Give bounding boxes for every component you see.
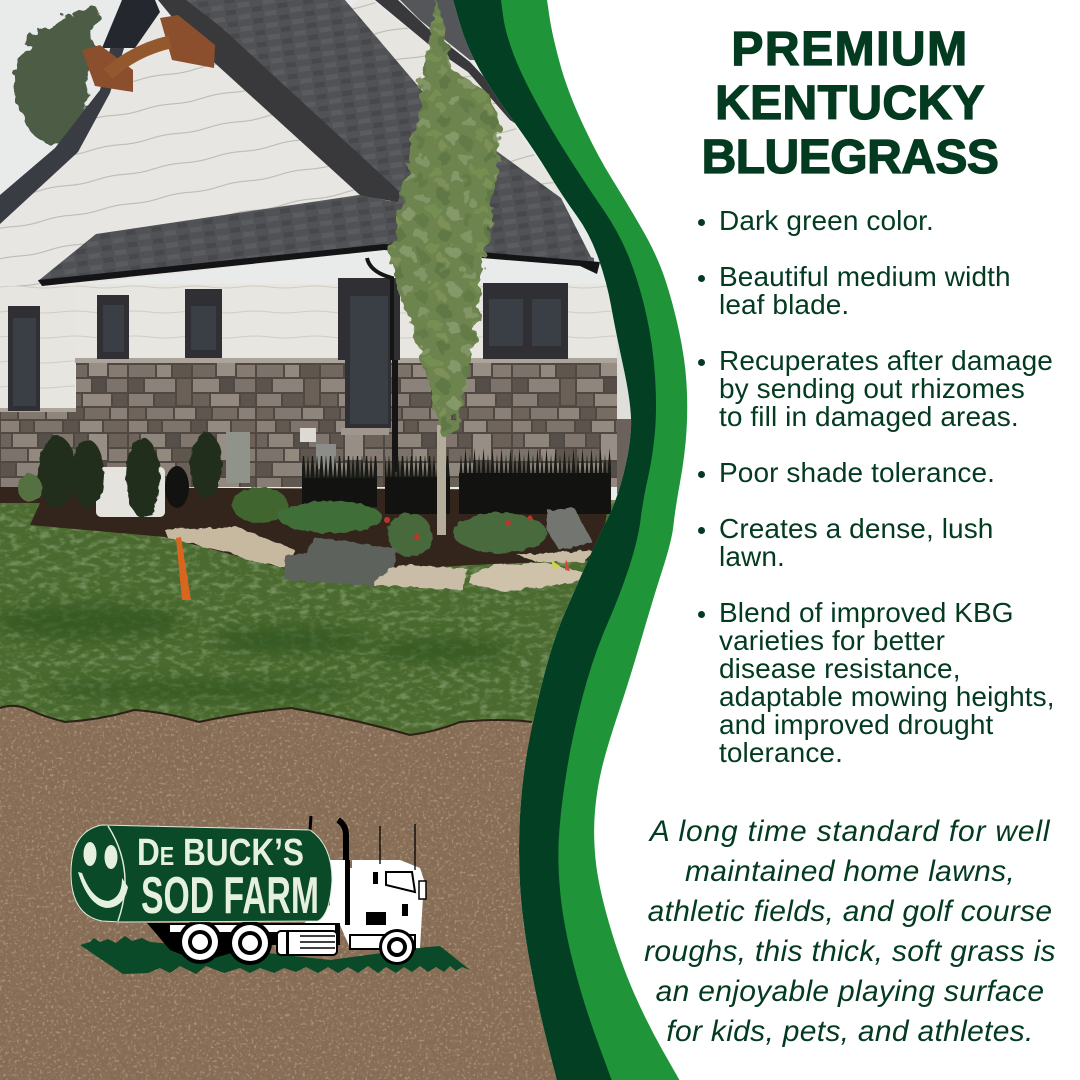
logo grass xyxy=(80,936,470,974)
italic closing statement: A long time standard for well xyxy=(650,815,1050,848)
mulch bed xyxy=(0,487,610,570)
generator xyxy=(96,467,165,517)
red flowers xyxy=(384,516,532,540)
bullet: blend: and improved drought xyxy=(719,709,993,740)
bullet: color: Dark green color. xyxy=(719,205,934,236)
italic closing statement: for kids, pets, and athletes. xyxy=(666,1015,1034,1048)
upper right gable xyxy=(345,0,565,198)
title: BLUEGRASS xyxy=(702,131,998,184)
shrubs xyxy=(38,432,222,518)
right roof trim xyxy=(375,0,515,124)
mowing stripes xyxy=(0,604,510,700)
side wall xyxy=(617,338,631,419)
soil xyxy=(0,706,557,1080)
sod roll xyxy=(71,825,332,922)
bullet list of features xyxy=(698,205,1055,768)
stone base xyxy=(76,362,617,487)
lower white wall xyxy=(75,284,617,362)
dark hedges xyxy=(165,466,611,514)
bullet: recovery: by sending out rhizomes xyxy=(719,373,1025,404)
bullet: density xyxy=(697,515,1077,571)
wave: light green band xyxy=(501,0,720,1080)
windows xyxy=(8,278,568,428)
logo: De Buck's Sod Farm xyxy=(71,816,470,974)
garden plants xyxy=(18,474,547,557)
top right roof corner xyxy=(400,0,474,60)
bullet: blend: Blend of improved KBG xyxy=(719,597,1014,628)
italic closing statement: athletic fields, and golf course xyxy=(648,895,1052,928)
downspout xyxy=(367,258,392,360)
sod lawn xyxy=(0,500,645,760)
utility boxes xyxy=(226,428,336,483)
truck trailer and cab xyxy=(300,860,424,948)
main grey roof xyxy=(180,0,592,259)
white text panel background xyxy=(547,0,1080,1080)
lower porch roof xyxy=(38,195,594,283)
dark gable box xyxy=(102,0,160,48)
logo wordmark: DE BUCK’S xyxy=(137,832,304,874)
sill xyxy=(341,428,389,435)
bullet: shade: Poor shade tolerance. xyxy=(719,457,995,488)
background tree xyxy=(16,4,100,143)
italic closing statement: roughs, this thick, soft grass is xyxy=(644,935,1056,968)
photo: house with new sod lawn xyxy=(0,0,660,1080)
sod edge xyxy=(0,706,532,735)
stone caps xyxy=(75,358,617,363)
italic closing statement: an enjoyable playing surface xyxy=(656,975,1044,1008)
bullet: leaf blade xyxy=(697,263,1077,319)
rocks xyxy=(165,508,593,592)
sky xyxy=(0,0,618,500)
background artwork: photo, green waves and logo xyxy=(0,0,688,1080)
bullet: density: lawn. xyxy=(719,541,785,572)
exhaust stacks xyxy=(338,820,346,860)
bullet: blend: adaptable mowing heights, xyxy=(719,681,1055,712)
title xyxy=(702,23,998,184)
bullet: recovery xyxy=(697,347,1077,431)
smiley face xyxy=(78,842,128,908)
timber bracket xyxy=(82,15,215,92)
title: KENTUCKY xyxy=(715,77,985,130)
bullet: blend: tolerance. xyxy=(719,737,843,768)
cab windows xyxy=(386,872,415,892)
flags xyxy=(551,559,570,571)
bullet: leaf blade: Beautiful medium width xyxy=(719,261,1011,292)
logo wordmark: SOD FARM xyxy=(141,867,319,925)
italic closing statement: maintained home lawns, xyxy=(685,855,1015,888)
gable roof trim xyxy=(158,0,400,202)
italic closing statement xyxy=(644,815,1056,1048)
hedge blades xyxy=(302,448,611,478)
left roof trim xyxy=(0,0,124,224)
wave: dark green band xyxy=(453,0,700,1080)
foliage xyxy=(390,0,499,439)
bullet: blend xyxy=(697,599,1077,767)
title: PREMIUM xyxy=(731,23,969,76)
bullet: density: Creates a dense, lush xyxy=(719,513,994,544)
logo wordmark xyxy=(137,832,319,925)
young poplar tree xyxy=(390,0,499,535)
fuel tank xyxy=(277,931,337,955)
window glass xyxy=(13,296,561,424)
eave xyxy=(38,244,600,286)
bullet: recovery: Recuperates after damage xyxy=(719,345,1053,376)
bullet: leaf blade: leaf blade. xyxy=(719,289,849,320)
truck chassis xyxy=(147,923,340,962)
trunk xyxy=(437,425,446,535)
bullet: recovery: to fill in damaged areas. xyxy=(719,401,1019,432)
wheels xyxy=(178,920,415,965)
bullet: blend: disease resistance, xyxy=(719,653,961,684)
orange stake xyxy=(176,537,191,600)
lawn texture xyxy=(0,500,616,734)
soil speckle xyxy=(0,707,556,1080)
white gable wall xyxy=(0,21,359,286)
bullet: blend: varieties for better xyxy=(719,625,945,656)
